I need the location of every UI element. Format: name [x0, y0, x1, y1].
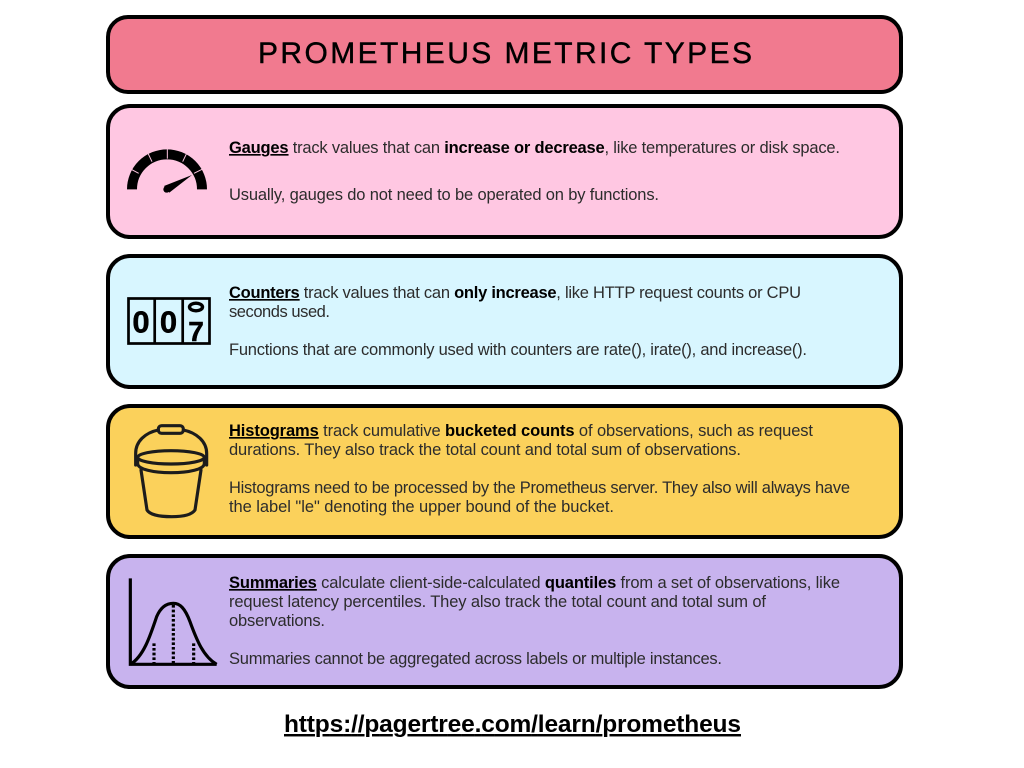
title: PROMETHEUS METRIC TYPES	[258, 37, 752, 70]
icon: counter: 0	[160, 304, 177, 340]
text: gauges description: Gauges track values that can increase or decrease, like temperatures or disk space.	[229, 139, 840, 157]
icon: bucket	[136, 426, 207, 517]
panel: summaries	[108, 556, 901, 687]
icon: counter	[128, 298, 210, 347]
text: counters description: seconds used.	[229, 303, 330, 321]
icon: bell curve	[130, 578, 217, 664]
icon: counter: 7	[188, 316, 204, 347]
text: gauges description	[229, 139, 840, 204]
text: gauges description: Usually, gauges do not need to be operated on by functions.	[229, 186, 659, 204]
text: counters description: Counters track values that can only increase, like HTTP request counts or CPU	[229, 284, 801, 302]
panel: histograms	[108, 406, 901, 537]
text: counters description	[229, 284, 807, 359]
text: histograms description: Histograms track cumulative bucketed counts of observations, such as request	[229, 422, 813, 440]
text: summaries description: Summaries cannot be aggregated across labels or multiple instances.	[229, 650, 722, 668]
text: histograms description: durations. They also track the total count and total sum of observations.	[229, 441, 741, 459]
text: summaries description: observations.	[229, 612, 325, 630]
panel: counters	[108, 256, 901, 387]
text: counters description: Functions that are commonly used with counters are rate(), irate(), and increase().	[229, 341, 807, 359]
panel: gauges	[108, 106, 901, 237]
icon: gauge	[130, 148, 203, 193]
text: histograms description	[229, 422, 850, 516]
text: summaries description: Summaries calculate client-side-calculated quantiles from a set of observations, like	[229, 574, 840, 592]
text: summaries description	[229, 574, 840, 668]
panel: title banner	[108, 17, 901, 92]
text: summaries description: request latency percentiles. They also track the total count and total sum of	[229, 593, 766, 611]
icon: counter: 0	[132, 304, 150, 340]
text: histograms description: the label "le" denoting the upper bound of the bucket.	[229, 498, 614, 516]
text: histograms description: Histograms need to be processed by the Prometheus server. They also will always have	[229, 479, 850, 497]
footer link: https://pagertree.com/learn/prometheus	[284, 711, 741, 738]
